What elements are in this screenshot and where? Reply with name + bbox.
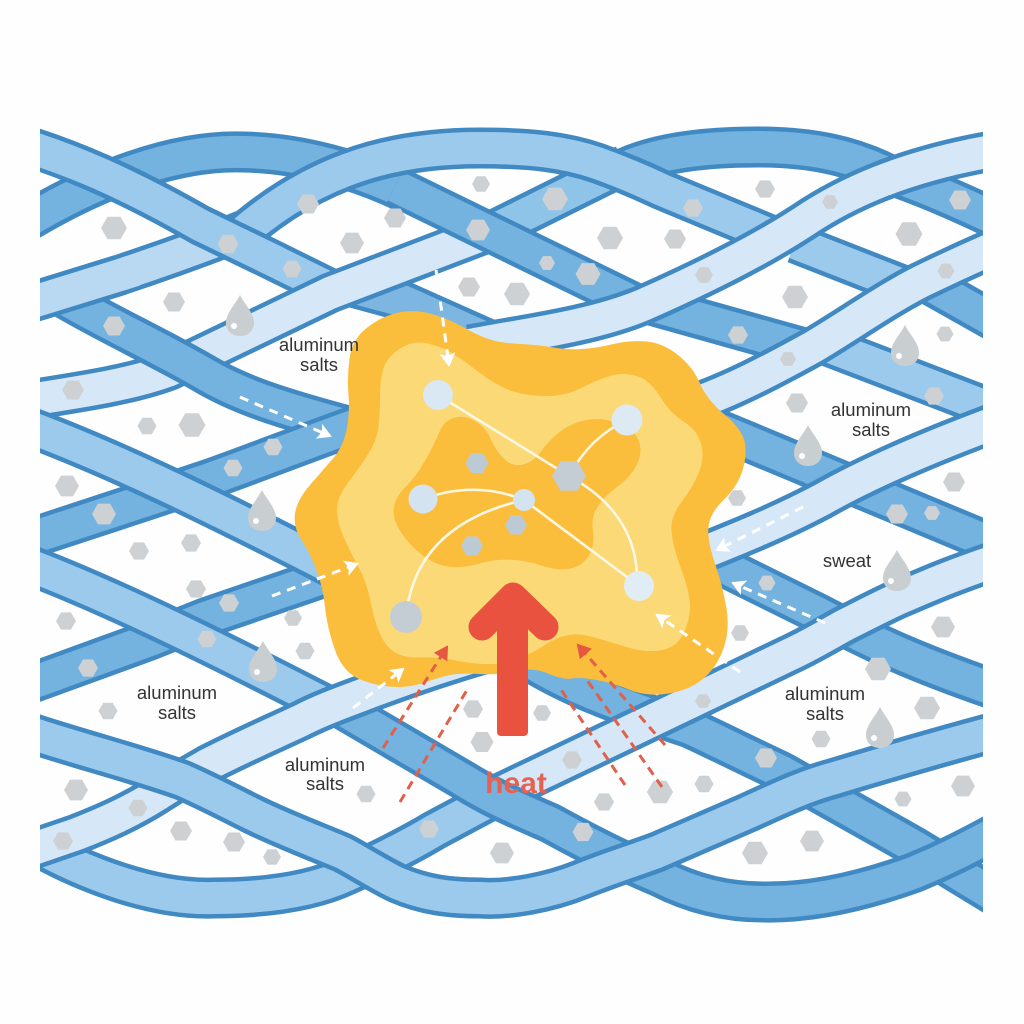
large red heat arrow bbox=[482, 596, 545, 736]
hexagonal aluminum salt particles bbox=[53, 176, 975, 865]
label: aluminum salts upper right: aluminum bbox=[831, 399, 911, 420]
blob inner core bbox=[394, 417, 640, 569]
white dashed flow arrows bbox=[240, 270, 825, 708]
label: aluminum salts upper left: salts bbox=[300, 354, 338, 375]
blob outer layer bbox=[295, 311, 746, 695]
label: aluminum salts upper left: aluminum bbox=[279, 334, 359, 355]
sweat droplets bbox=[226, 295, 919, 748]
label: aluminum salts bottom centre: salts bbox=[306, 773, 344, 794]
heat-affected blob bbox=[295, 311, 746, 695]
label: aluminum salts bottom centre: aluminum bbox=[285, 754, 365, 775]
label: aluminum salts upper right: salts bbox=[852, 419, 890, 440]
red dashed heat arrows bbox=[383, 645, 665, 802]
label: aluminum salts lower right: salts bbox=[806, 703, 844, 724]
network links bbox=[406, 395, 639, 617]
label: aluminum salts lower left: aluminum bbox=[137, 682, 217, 703]
molecular network inside blob bbox=[390, 380, 654, 633]
infographic canvas bbox=[40, 126, 983, 923]
label: heat: heat bbox=[485, 767, 547, 800]
woven fabric bands bbox=[0, 141, 1010, 905]
label: sweat: sweat bbox=[823, 550, 871, 571]
label: aluminum salts lower right: aluminum bbox=[785, 683, 865, 704]
network nodes bbox=[390, 380, 654, 633]
label: aluminum salts lower left: salts bbox=[158, 702, 196, 723]
blob middle layer bbox=[337, 342, 703, 664]
